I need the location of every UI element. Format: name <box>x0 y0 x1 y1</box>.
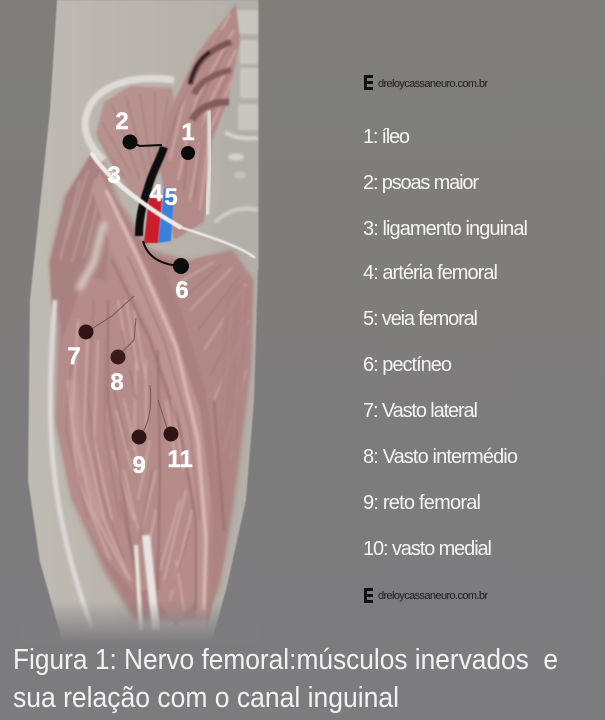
lateral white fascia <box>78 222 104 290</box>
number labels: 2 <box>115 108 129 135</box>
legend list <box>363 126 528 560</box>
inguinal ligament <box>92 154 254 257</box>
dot 8 <box>122 318 136 352</box>
caption <box>13 644 558 714</box>
femoral nerve <box>139 147 164 236</box>
number labels: 7 <box>67 343 81 370</box>
femoral artery <box>144 197 162 243</box>
dot 7 <box>90 296 134 330</box>
pointer 2 <box>130 142 162 146</box>
skin silhouette <box>28 0 258 640</box>
logo top: dreloycassaneuro.com.br <box>378 78 488 90</box>
muscle: iliacus fan <box>96 86 176 206</box>
legend list: 5: veia femoral <box>363 308 478 330</box>
number labels: 3 <box>107 162 121 189</box>
muscle: rectus femoris <box>104 240 160 590</box>
legend list: 4: artéria femoral <box>363 262 498 284</box>
pointer 6 <box>143 241 181 266</box>
legend list: 2: psoas maior <box>363 172 479 194</box>
number labels <box>67 108 195 479</box>
legend list: 3: ligamento inguinal <box>363 218 528 240</box>
bottom fade <box>20 600 260 643</box>
caption: sua relação com o canal inguinal <box>13 682 399 714</box>
number labels: 4 <box>149 180 163 207</box>
pelvis and spine background <box>210 0 258 270</box>
femoral artery and vein <box>144 188 174 243</box>
thigh muscle mass <box>50 150 252 620</box>
dot 1 <box>181 146 195 160</box>
number labels: 6 <box>175 277 189 304</box>
knee tendons <box>136 535 156 630</box>
number labels: 11 <box>167 446 193 473</box>
white tendon <box>207 110 210 215</box>
muscle: tensor fasciae latae <box>50 150 106 318</box>
legend list: 1: íleo <box>363 126 410 148</box>
muscle: vastus medialis <box>158 340 198 626</box>
number labels: 8 <box>110 369 124 396</box>
muscle separation shadows <box>108 260 224 610</box>
number labels: 5 <box>164 184 178 211</box>
iliac crest <box>85 78 174 160</box>
upper nerve roots <box>190 42 231 120</box>
thigh highlight <box>72 380 100 520</box>
dot 9 <box>143 385 151 432</box>
muscle: sartorius band <box>92 172 214 620</box>
number labels: 1 <box>181 119 195 146</box>
muscle: vastus lateralis <box>56 278 138 592</box>
logo bottom: dreloycassaneuro.com.br <box>378 590 488 602</box>
legend list: 6: pectíneo <box>363 354 452 376</box>
caption: Figura 1: Nervo femoral:músculos inervados e <box>13 644 558 676</box>
legend list: 7: Vasto lateral <box>363 400 478 422</box>
pointers and dots <box>78 134 195 444</box>
legend list: 10: vasto medial <box>363 538 492 560</box>
number labels: 9 <box>132 452 146 479</box>
muscle: adductors, upper right <box>166 252 253 530</box>
femoral vein <box>158 188 174 243</box>
legend list: 8: Vasto intermédio <box>363 446 518 468</box>
iliotibial tract <box>50 300 92 628</box>
muscle: psoas major <box>160 4 240 240</box>
muscle: gracilis, right edge <box>206 280 250 630</box>
dot 11 <box>158 400 167 428</box>
anatomical illustration: thigh and pelvis <box>20 0 260 643</box>
legend list: 9: reto femoral <box>363 492 481 514</box>
